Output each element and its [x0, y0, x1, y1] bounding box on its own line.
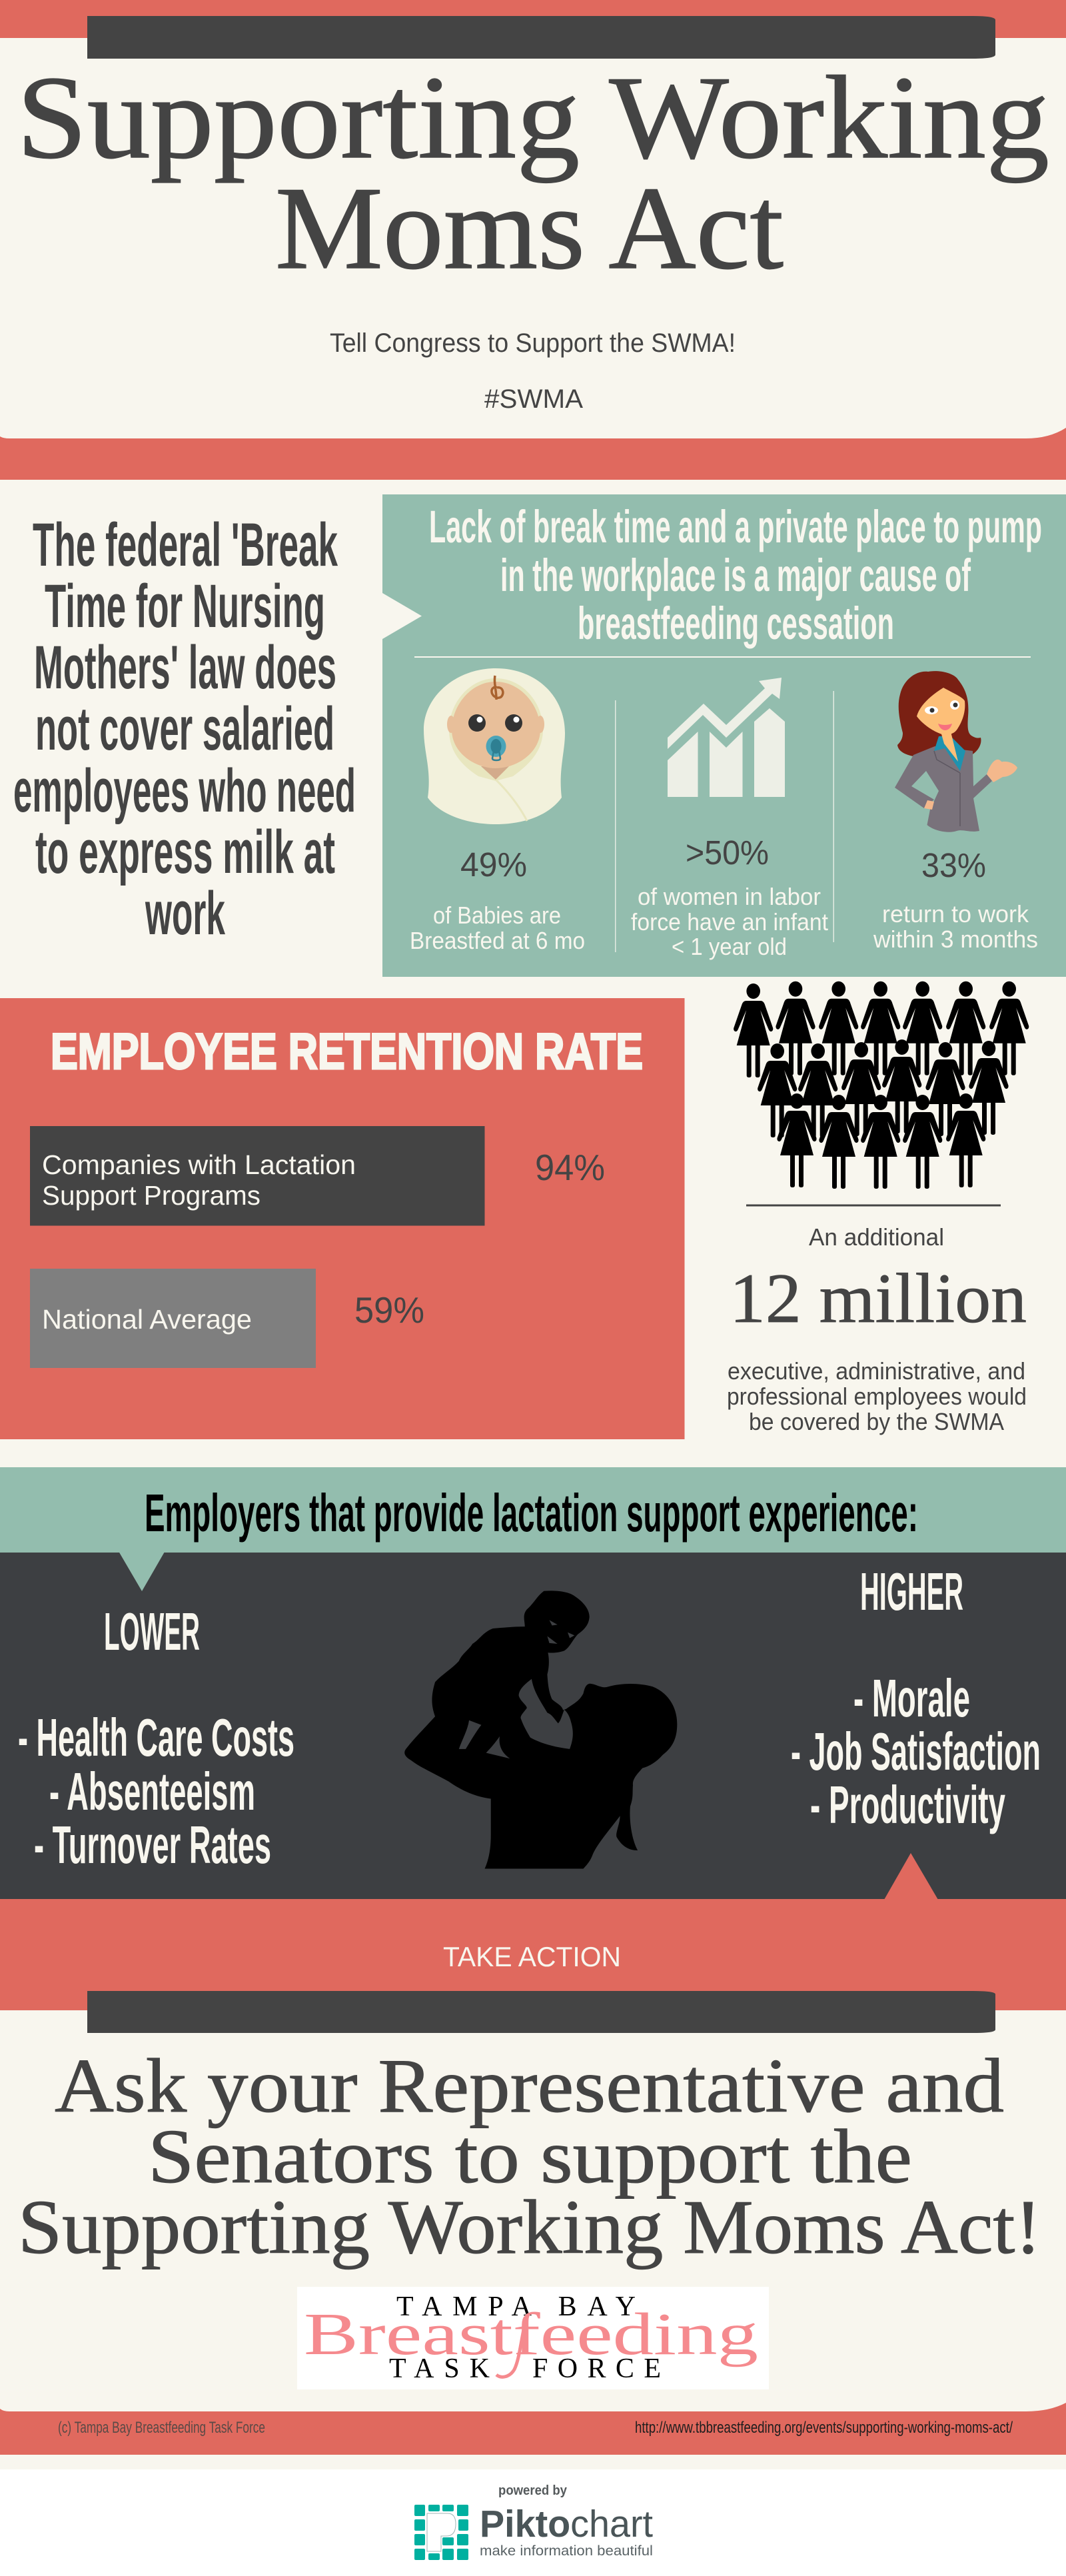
stat: 49% babies: 49% [460, 846, 527, 884]
bar: lactation support companies: Companies with Lactation [42, 1149, 356, 1180]
closing heading: Supporting Working Moms Act! [18, 2185, 1041, 2269]
stat: 12 million: professional employees would [727, 1383, 1027, 1410]
footer band [0, 2403, 1066, 2455]
panel: breastfeeding cessation [382, 494, 1066, 977]
logo: Tampa Bay Breastfeeding Task Force: Breastfeeding [304, 2301, 758, 2367]
text block: federal law gap: work [145, 880, 225, 948]
text block: federal law gap: The federal 'Break [33, 511, 338, 579]
lower list: - Absenteeism [49, 1762, 255, 1821]
text block: federal law gap: Mothers' law does [34, 634, 336, 702]
icon: mother lifting baby silhouette [404, 1591, 677, 1869]
stat: 49% babies: Breastfed at 6 mo [410, 927, 585, 954]
panel heading [429, 501, 1042, 649]
stat: 33% return: within 3 months [873, 926, 1038, 953]
stat: 33% return [873, 846, 1038, 953]
stat: 12 million: 12 million [730, 1259, 1027, 1337]
header panel [0, 0, 1066, 480]
title: Supporting Working [17, 51, 1049, 183]
logo: Tampa Bay Breastfeeding Task Force [297, 2287, 769, 2389]
higher list: - Morale [853, 1668, 970, 1728]
icon: rising bar chart [668, 678, 785, 797]
icon: businesswoman [895, 671, 1017, 832]
stat: 33% return: return to work [882, 900, 1029, 928]
powered by label: powered by [498, 2483, 568, 2498]
closing heading [18, 2044, 1041, 2269]
stat: 49% babies: of Babies are [433, 902, 561, 929]
text block: federal law gap: not cover salaried [35, 695, 334, 763]
title [17, 51, 1049, 294]
bar: national average [30, 1269, 316, 1368]
logo: Tampa Bay Breastfeeding Task Force: TAMPA BAY [396, 2291, 636, 2322]
value: 59%: 59% [354, 1289, 424, 1331]
text block: federal law gap [13, 511, 356, 948]
chart heading: EMPLOYEE RETENTION RATE [51, 1023, 643, 1080]
icon: swaddled baby [424, 668, 565, 824]
tagline: make information beautiful [480, 2543, 653, 2559]
stat: 12 million: An additional [809, 1223, 944, 1251]
stat: over 50% women: < 1 year old [672, 933, 787, 960]
higher list [791, 1562, 1041, 1834]
panel: employer benefits [0, 1467, 1066, 1899]
subtitle: Tell Congress to Support the SWMA! [330, 328, 736, 358]
higher list: HIGHER [860, 1562, 963, 1621]
bar: national average: National Average [42, 1304, 252, 1335]
icon: crowd of women [734, 981, 1029, 1189]
closing heading: Senators to support the [148, 2114, 912, 2199]
panel: employee retention rate [0, 998, 685, 1439]
copyright: (c) Tampa Bay Breastfeeding Task Force [58, 2419, 265, 2437]
lower list [18, 1602, 294, 1874]
stat: over 50% women [631, 834, 828, 960]
stat: 12 million [727, 1223, 1027, 1435]
text block: federal law gap: to express milk at [35, 818, 335, 886]
lower list: - Health Care Costs [18, 1708, 294, 1767]
logo: Tampa Bay Breastfeeding Task Force: FORCE [532, 2353, 661, 2384]
text block: federal law gap: employees who need [13, 757, 356, 825]
icon: Piktochart logo mark [414, 2505, 468, 2560]
stat: over 50% women: force have an infant [631, 908, 828, 936]
stat: over 50% women: >50% [686, 834, 769, 872]
powered by footer [0, 2469, 1066, 2576]
stat: 12 million: be covered by the SWMA [749, 1408, 1004, 1435]
hashtag: #SWMA [484, 384, 583, 414]
lower list: LOWER [104, 1602, 200, 1661]
value: 94%: 94% [535, 1147, 605, 1188]
stat: 49% babies [410, 846, 585, 954]
title: Moms Act [275, 162, 784, 294]
take action label: TAKE ACTION [443, 1941, 621, 1972]
call to action band [0, 1853, 1066, 2033]
logo: Tampa Bay Breastfeeding Task Force: TASK [389, 2353, 490, 2384]
stat: over 50% women: of women in labor [638, 883, 821, 910]
text block: federal law gap: Time for Nursing [45, 572, 325, 640]
stat: 33% return: 33% [921, 846, 986, 884]
bar: lactation support companies: Support Programs [42, 1180, 261, 1211]
stat: 12 million: executive, administrative, and [728, 1357, 1025, 1385]
bar: lactation support companies [30, 1126, 485, 1226]
lower list: - Turnover Rates [34, 1815, 271, 1874]
wordmark: Piktochart [480, 2503, 653, 2545]
closing heading: Ask your Representative and [55, 2044, 1004, 2128]
